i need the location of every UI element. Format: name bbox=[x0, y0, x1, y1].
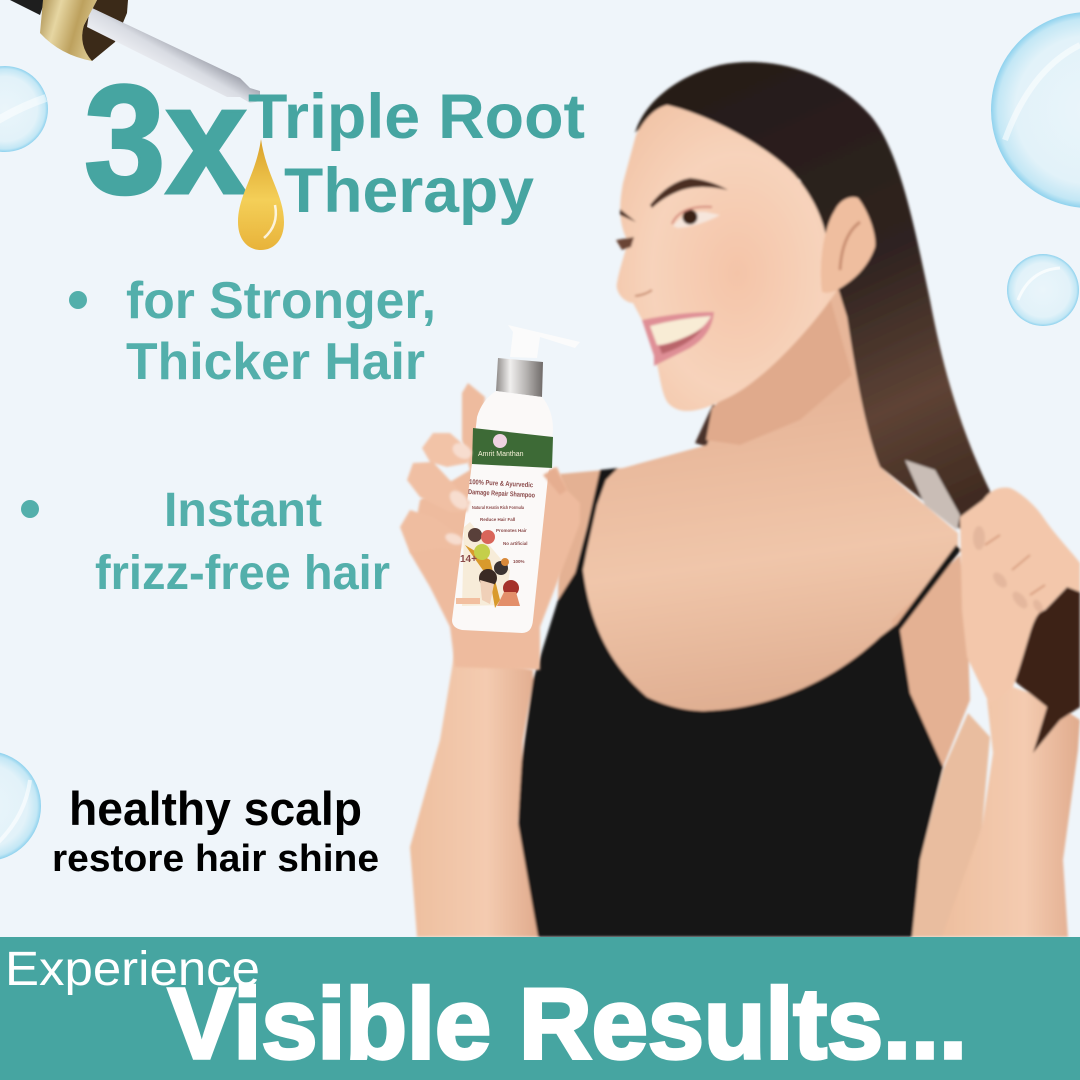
benefit: frizz-free hair bbox=[21, 484, 390, 600]
benefit: stronger thicker hair bbox=[69, 272, 436, 391]
bubble: right small bbox=[1007, 254, 1079, 326]
brand text: Amrit Manthan bbox=[478, 451, 524, 458]
left arm bbox=[410, 650, 538, 937]
heading: 3x: 3x bbox=[84, 53, 247, 226]
photo: hand and shampoo bottle: Promotes Hair bbox=[496, 528, 527, 533]
bubble: bottom left bbox=[0, 751, 41, 861]
armhole skin bbox=[892, 555, 970, 767]
upper right arm bbox=[912, 713, 990, 937]
label text: 14+: 14+ bbox=[460, 554, 477, 565]
photo: woman bbox=[410, 62, 1080, 937]
icon: oil drop bbox=[238, 139, 284, 250]
product label text: 100% Pure & Ayurvedic bbox=[469, 479, 533, 489]
hair highlight bbox=[905, 460, 960, 530]
fingers bbox=[400, 433, 567, 553]
photo: hand and shampoo bottle bbox=[400, 325, 580, 670]
bubble: top right bbox=[991, 12, 1080, 208]
text: healthy scalp, restore hair shine: restore hair shine bbox=[52, 838, 379, 880]
benefit: frizz-free hair: Instant bbox=[164, 484, 322, 537]
eye bbox=[616, 207, 720, 250]
ear bbox=[821, 197, 875, 293]
benefit: frizz-free hair: frizz-free hair bbox=[95, 547, 390, 600]
product label text: Damage Repair Shampoo bbox=[468, 489, 535, 500]
heading: Triple Root Therapy: Triple Root bbox=[248, 82, 585, 152]
green band bbox=[472, 428, 553, 468]
product label text bbox=[468, 479, 535, 500]
banner text: Visible Results...: Visible Results... bbox=[168, 968, 967, 1080]
bottle body bbox=[452, 391, 553, 633]
hair strand in hand bbox=[1013, 587, 1080, 753]
far shoulder bbox=[558, 470, 604, 600]
black top bbox=[518, 468, 961, 937]
hair behind neck bbox=[695, 404, 719, 447]
text: healthy scalp, restore hair shine: healthy scalp bbox=[69, 782, 362, 835]
photo: hand and shampoo bottle: 100% bbox=[513, 559, 525, 564]
banner text: Experience: Experience bbox=[5, 943, 260, 996]
right hand bbox=[960, 488, 1080, 705]
people illustration bbox=[456, 569, 520, 606]
heading: Triple Root Therapy: Therapy bbox=[284, 156, 534, 226]
pump bbox=[508, 325, 580, 358]
icon: oil dropper bbox=[10, 0, 260, 103]
text: healthy scalp, restore hair shine bbox=[52, 782, 379, 880]
chest and neck skin bbox=[575, 288, 958, 730]
photo: hand and shampoo bottle: No artificial bbox=[503, 541, 528, 546]
neck shadow bbox=[706, 298, 852, 445]
nose shadow bbox=[635, 290, 652, 296]
photo: hand and shampoo bottle: Natural Keratin Rich Formula bbox=[472, 505, 524, 510]
banner bbox=[0, 937, 1080, 1080]
eyebrow bbox=[650, 178, 728, 208]
benefit: stronger thicker hair: for Stronger, bbox=[126, 272, 436, 330]
herbs illustration bbox=[462, 522, 510, 608]
hair mass bbox=[635, 62, 992, 532]
photo: hand and shampoo bottle: Reduce Hair Fall bbox=[480, 517, 515, 522]
palm and thumb bbox=[410, 383, 580, 670]
lips and teeth bbox=[642, 312, 714, 366]
collar bbox=[496, 358, 543, 397]
forearm right bbox=[942, 687, 1080, 937]
bubble: top left bbox=[0, 66, 48, 152]
face bbox=[617, 105, 836, 411]
benefit: stronger thicker hair: Thicker Hair bbox=[126, 333, 425, 391]
heading: Triple Root Therapy bbox=[248, 82, 585, 226]
